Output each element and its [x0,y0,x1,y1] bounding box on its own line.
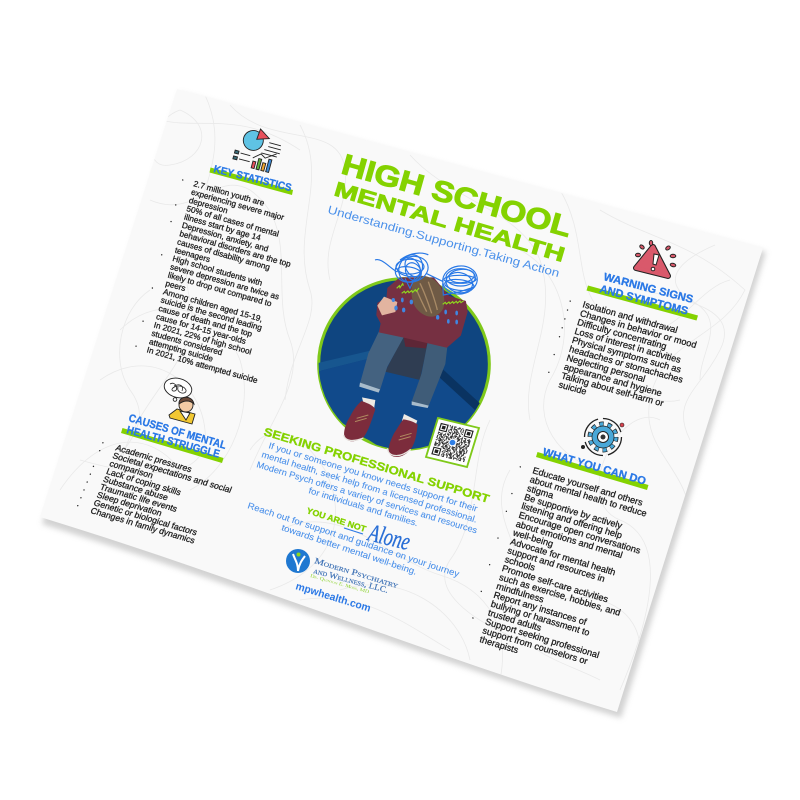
blue tear drops [392,298,458,324]
bullet list: warning signs: suicide [557,379,588,397]
bullet list: what you can do: Advocate for mental health [509,536,617,577]
bullet list: key statistics: illness start by age 14 [183,212,262,243]
bullet list: key statistics: students considered [150,329,224,357]
heading bar: what you can do [536,452,648,490]
paragraph: seek help: for individuals and families. [307,485,419,528]
bullet list: key statistics: attempting suicide [148,337,214,364]
paragraph: seek help: Modern Psych offers a variety of services and resources [255,459,479,536]
bullet list: causes: Changes in family dynamics [89,505,197,546]
heading: seeking professional support: SEEKING PROFESSIONAL SUPPORT [262,426,491,506]
jeans [359,331,447,408]
bullet list: causes: Traumatic life events [99,482,179,514]
heading bar: key statistics [210,168,293,195]
heading: warning signs and symptoms: AND SYMPTOMS [598,283,689,318]
bullet list: key statistics: In 2021, 22% of high school [153,320,253,357]
bullet list: what you can do [465,461,658,681]
bullet list: what you can do: Be supportive by actively [523,492,624,531]
bullet list: causes: Genetic or biological factors [92,498,199,537]
you are not alone [305,505,413,556]
hand [377,297,397,315]
icon: charts and checklist [232,124,285,174]
bullet list: causes: comparison [108,458,155,480]
panel: seeking professional support [246,426,491,615]
bullet list: warning signs: Loss of interest in activities [573,326,683,365]
paragraph: reach out: Reach out for support and guidance on your journey [246,500,461,579]
bullet list: key statistics: causes of disability among [176,237,271,272]
bullet list: key statistics: In 2021, 10% attempted suicide [146,345,259,385]
bullet list: what you can do: about emotions and mental [515,519,624,560]
heading: causes of mental health struggle: HEALTH STRUGGLE [125,424,221,461]
bullet list: what you can do: stigma [526,483,556,501]
website: mpwhealth.com [294,580,372,615]
bullet list: key statistics: cause of death and the top [157,304,254,339]
bullet list: key statistics: experiencing severe major [190,188,285,222]
bullet list: warning signs: appearance and hygiene [563,362,663,398]
bullet list: key statistics [134,176,308,386]
bullet list: what you can do: Promote self-care activities [501,563,610,604]
title [332,149,575,267]
bullet list: causes: Societal expectations and social [111,450,233,495]
bullet list: key statistics: depression [188,196,229,216]
bullet list: what you can do: bullying or harassment to [490,599,591,638]
icon: worried student [162,375,195,424]
bullet list: what you can do: trusted adults [487,608,543,633]
socks and shoes [344,397,418,457]
bullet list: what you can do: Support seeking professional [484,617,601,660]
bullet list: warning signs: Talking about self-harm or [560,371,665,408]
subtitle: Understanding.Supporting.Taking Action [326,204,561,280]
title: MENTAL HEALTH [332,178,567,267]
heading: key statistics: KEY STATISTICS [212,163,293,194]
bullet list: causes: Academic pressures [114,443,194,474]
panel: warning signs and symptoms [544,240,703,422]
bullet list: warning signs: Neglecting personal [565,353,647,384]
icon: gear with arrows [581,418,624,456]
photo: student hugging knees with scribbles [317,251,500,460]
bullet list: what you can do: support and resources in [506,545,606,584]
bullet list: warning signs: Physical symptoms such as [571,335,683,375]
photo backdrop circle [317,279,500,460]
bullet list: what you can do: such as exercise, hobbies, and [498,572,622,618]
bullet list: what you can do: Report any instances of [492,590,588,627]
bullet list: key statistics: suicide is the second leading [160,296,263,333]
bullet list: what you can do: listening and offering help [520,501,623,540]
panel: key statistics [134,124,308,386]
icon: warning triangle [636,240,676,276]
paragraph: seek help: If you or someone you know needs support for their [267,440,479,514]
paragraph: reach out: towards better mental well-being. [280,522,418,577]
you are not alone: Alone [364,519,413,556]
bullet list: warning signs: Changes in behavior or mood [579,308,698,350]
bullet list: what you can do: therapists [478,634,520,655]
heading bar: warning signs [586,286,698,320]
bullet list: key statistics: Depression, anxiety, and [181,221,270,254]
bullet list: warning signs [544,296,703,422]
bullet list: warning signs: Difficulty concentrating [576,317,668,351]
hair [411,276,444,317]
bullet list: causes: Substance abuse [102,474,170,502]
sweater [377,278,467,347]
bullet list: what you can do: well-being [511,527,555,549]
scribbles over head [375,251,479,296]
title: HIGH SCHOOL [338,149,575,244]
heading: warning signs and symptoms: WARNING SIGNS [602,271,694,306]
bullet list: causes [75,438,239,551]
bullet list: key statistics: behavioral disorders are the top [178,229,292,269]
bullet list: key statistics: High school students with [171,254,264,288]
heading: causes of mental health struggle: CAUSES OF MENTAL [127,412,228,452]
logo: Modern Psychiatry and Wellness: and Wellness, LLC. [312,565,389,595]
bullet list: causes: Sleep deprivation [95,490,164,518]
bullet list: key statistics: Among children aged 15-19, [162,287,264,324]
bullet list: key statistics: teenagers [174,246,211,264]
bullet list: key statistics: severe depression are twice as [169,262,280,302]
bullet list: warning signs: Isolation and withdrawal [581,299,679,335]
bullet list: what you can do: Educate yourself and others [531,465,644,508]
heading bar: causes [121,428,224,463]
heading: warning signs and symptoms [598,271,694,318]
bullet list: key statistics: 50% of all cases of mental [185,204,280,239]
bullet list: what you can do: support from counselors or [481,625,589,666]
heading: what you can do: WHAT YOU CAN DO [541,446,648,488]
bullet list: key statistics: likely to drop out compared to [167,271,273,308]
paragraph: seek help: mental health, seek help from a licensed professional. [260,449,479,525]
QR code [426,418,479,467]
you are not alone: YOU ARE NOT [305,505,368,534]
logo: Modern Psychiatry and Wellness [286,549,400,595]
panel: what you can do [465,418,658,681]
green zigzags [397,284,464,304]
bullet list: warning signs: headaches or stomachaches [568,344,685,385]
bullet list: what you can do: schools [504,554,537,573]
bullet list: causes: Lack of coping skills [105,466,183,498]
bullet list: what you can do: Encourage open conversations [517,510,642,556]
paper sheet [40,89,766,718]
bullet list: what you can do: mindfulness [495,581,546,605]
panel: causes of mental health struggle [75,375,239,551]
bullet list: key statistics: 2.7 million youth are [192,179,266,208]
bullet list: what you can do: about mental health to reduce [529,474,648,519]
logo: Modern Psychiatry and Wellness: Dr. Quinton E. Moss, MD [309,574,370,595]
bullet list: key statistics: peers [164,279,187,293]
logo: Modern Psychiatry and Wellness: Modern Psychiatry [313,555,400,590]
bullet list: key statistics: cause for 14-15 year-olds [155,312,247,346]
